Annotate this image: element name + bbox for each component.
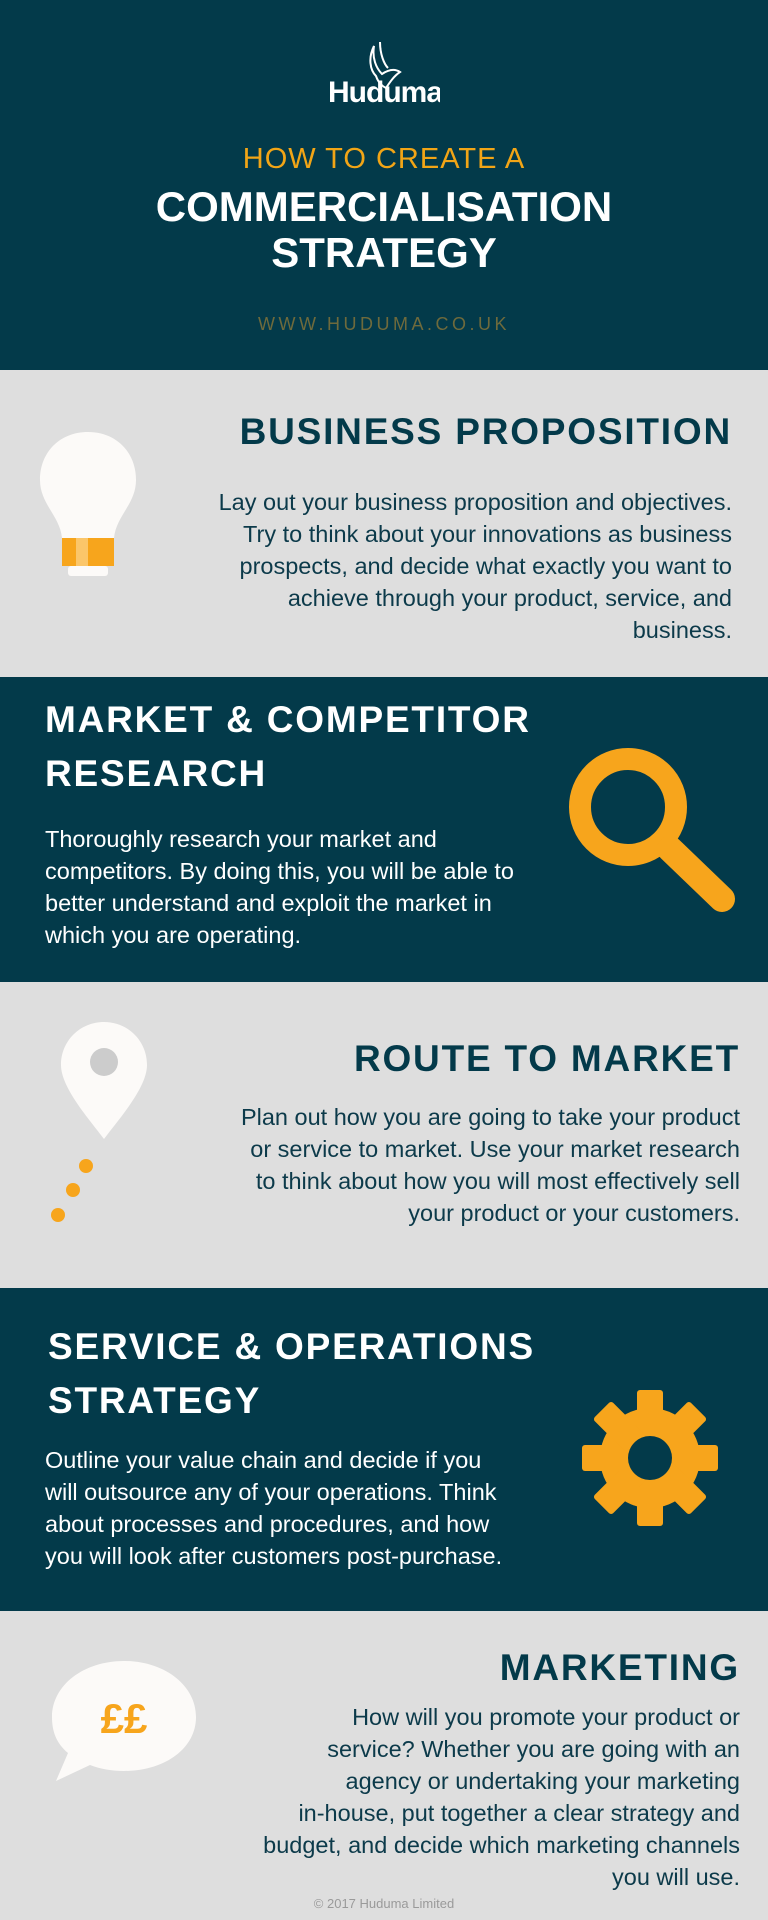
body text: in-house, put together a clear strategy and bbox=[298, 1800, 740, 1826]
heading bbox=[48, 1326, 535, 1421]
subtitle: HOW TO CREATE A bbox=[243, 143, 525, 175]
heading: RESEARCH bbox=[45, 753, 267, 794]
icon: speech bubble with pounds bbox=[52, 1661, 196, 1781]
title: COMMERCIALISATION bbox=[156, 183, 612, 230]
body text bbox=[219, 489, 732, 643]
body text: you will look after customers post-purchase. bbox=[45, 1543, 502, 1569]
body text: achieve through your product, service, and bbox=[288, 585, 732, 611]
footer: © 2017 Huduma Limited bbox=[314, 1896, 454, 1911]
body text bbox=[263, 1704, 740, 1890]
icon: speech bubble with pounds: ££ bbox=[101, 1695, 147, 1742]
heading: ROUTE TO MARKET bbox=[354, 1038, 740, 1079]
body text: which you are operating. bbox=[45, 922, 301, 948]
body text: Lay out your business proposition and objectives. bbox=[219, 489, 732, 515]
icon: gear bbox=[582, 1390, 718, 1526]
panel: route to market bbox=[0, 982, 768, 1288]
body text bbox=[241, 1104, 740, 1226]
icon: magnifier bbox=[569, 748, 735, 912]
body text: your product or your customers. bbox=[408, 1200, 740, 1226]
logo: Huduma dove bbox=[330, 42, 440, 109]
icon: light bulb bbox=[40, 432, 136, 576]
body text: agency or undertaking your marketing bbox=[346, 1768, 740, 1794]
body text: competitors. By doing this, you will be able to bbox=[45, 858, 514, 884]
panel: service & operations strategy bbox=[0, 1288, 768, 1611]
body text: will outsource any of your operations. Think bbox=[45, 1479, 497, 1505]
heading bbox=[45, 699, 531, 794]
url: WWW.HUDUMA.CO.UK bbox=[258, 314, 510, 334]
heading: MARKET & COMPETITOR bbox=[45, 699, 531, 740]
body text: or service to market. Use your market research bbox=[250, 1136, 740, 1162]
body text: to think about how you will most effectively sell bbox=[256, 1168, 740, 1194]
body text: Outline your value chain and decide if you bbox=[45, 1447, 481, 1473]
heading: SERVICE & OPERATIONS bbox=[48, 1326, 535, 1367]
body text: about processes and procedures, and how bbox=[45, 1511, 489, 1537]
title: STRATEGY bbox=[271, 229, 497, 276]
icon: location pin with dots bbox=[51, 1022, 147, 1222]
heading: BUSINESS PROPOSITION bbox=[240, 411, 732, 452]
heading: STRATEGY bbox=[48, 1380, 261, 1421]
body text: prospects, and decide what exactly you want to bbox=[240, 553, 732, 579]
body text: better understand and exploit the market in bbox=[45, 890, 492, 916]
title bbox=[156, 183, 612, 276]
body text bbox=[45, 1447, 502, 1569]
panel: market & competitor research bbox=[0, 677, 768, 982]
panel: header bbox=[0, 0, 768, 370]
body text: service? Whether you are going with an bbox=[327, 1736, 740, 1762]
body text: Try to think about your innovations as business bbox=[243, 521, 732, 547]
body text: business. bbox=[633, 617, 732, 643]
body text: Plan out how you are going to take your product bbox=[241, 1104, 740, 1130]
body text: How will you promote your product or bbox=[352, 1704, 740, 1730]
body text: Thoroughly research your market and bbox=[45, 826, 437, 852]
body text: budget, and decide which marketing channels bbox=[263, 1832, 740, 1858]
body text bbox=[45, 826, 514, 948]
heading: MARKETING bbox=[500, 1647, 740, 1688]
panel: business proposition bbox=[0, 370, 768, 677]
body text: you will use. bbox=[612, 1864, 740, 1890]
panel: marketing bbox=[0, 1611, 768, 1920]
